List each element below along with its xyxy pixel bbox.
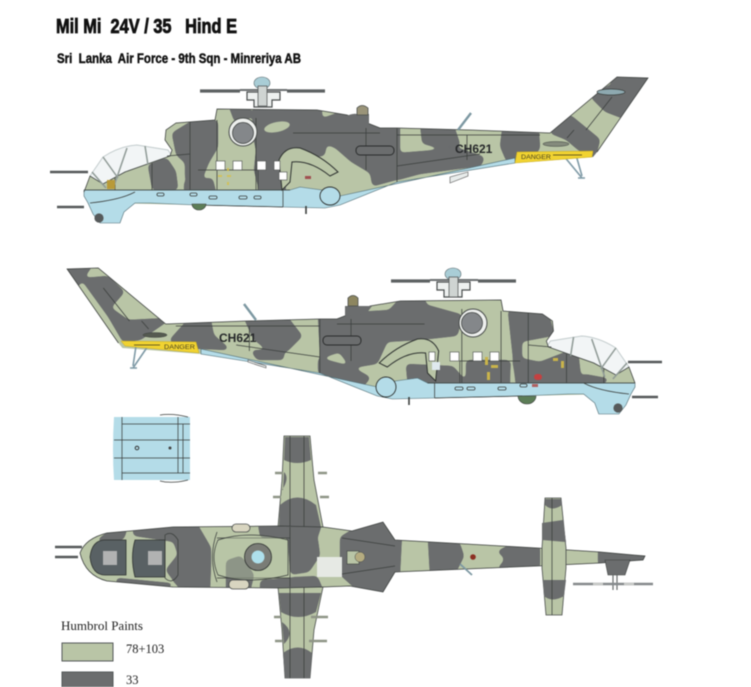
- fuselage camouflage: [68, 268, 635, 396]
- nose guns and chin turret: [50, 172, 104, 223]
- swatch label: 78+103: 78+103: [126, 642, 164, 656]
- legend: [61, 618, 164, 687]
- wings: [273, 436, 329, 678]
- left side view helicopter: [50, 70, 655, 223]
- engine top hub: [347, 551, 365, 564]
- swatch label: 33: 33: [126, 673, 138, 687]
- title: Mil Mi 24V / 35 Hind E: [56, 16, 237, 38]
- horizontal stabilizer: [542, 498, 566, 615]
- tail pod: [543, 142, 569, 146]
- main rotor: [200, 77, 325, 107]
- main rotor: [391, 268, 516, 297]
- fuselage lines: [80, 522, 645, 592]
- fuselage camouflage: [80, 522, 645, 592]
- subtitle: Sri Lanka Air Force - 9th Sqn - Minreriya AB: [57, 50, 301, 66]
- stores pod: [323, 336, 361, 345]
- danger band: DANGER: [164, 345, 196, 351]
- swatch: light green: [62, 643, 113, 661]
- red marker: [470, 554, 476, 560]
- cabin windows: [216, 161, 287, 180]
- tail antenna: [460, 564, 472, 575]
- serial number: CH621: [219, 331, 257, 345]
- canopy frames: [92, 146, 148, 188]
- nose guns and chin turret: [613, 362, 662, 413]
- panel lines: [67, 268, 635, 398]
- serial number: CH621: [455, 142, 493, 156]
- wheel well: [320, 187, 340, 205]
- tail pod: [143, 333, 167, 337]
- belly light blue: [84, 158, 515, 223]
- canopy: [90, 145, 172, 184]
- wheel well: [376, 377, 396, 397]
- top view helicopter: [55, 436, 653, 678]
- tail fin details: [597, 89, 625, 95]
- belly light blue: [201, 349, 635, 414]
- cockpits: [90, 540, 165, 577]
- wing stub fairing: [379, 339, 439, 381]
- gun barrels: [55, 547, 82, 557]
- engine exhaust stack: [345, 296, 372, 316]
- exhaust intake: [229, 118, 257, 146]
- tail rotor: [573, 560, 653, 590]
- danger band: [515, 151, 593, 163]
- underside detail panel: [113, 414, 190, 482]
- legend heading: Humbrol Paints: [61, 618, 143, 633]
- fuselage camouflage: [85, 76, 648, 205]
- pills and markings: [455, 357, 564, 390]
- antenna: [458, 113, 471, 130]
- wing stub fairing: [279, 148, 338, 190]
- landing gear: [130, 346, 536, 405]
- right side view helicopter: [60, 260, 662, 414]
- exhaust intake: [459, 309, 487, 337]
- danger band: [121, 341, 199, 353]
- landing gear: [192, 155, 585, 214]
- engine exhaust stack: [345, 106, 369, 125]
- cabin windows: [429, 352, 499, 370]
- rotor mast housing: [214, 524, 288, 589]
- antenna: [244, 304, 256, 320]
- swatch: dark grey: [62, 672, 113, 687]
- danger band: DANGER: [521, 155, 552, 161]
- canopy frames: [571, 337, 627, 379]
- panel lines: [84, 77, 648, 207]
- pills and markings: [107, 168, 311, 199]
- stores pod: [356, 146, 394, 155]
- canopy: [546, 336, 629, 375]
